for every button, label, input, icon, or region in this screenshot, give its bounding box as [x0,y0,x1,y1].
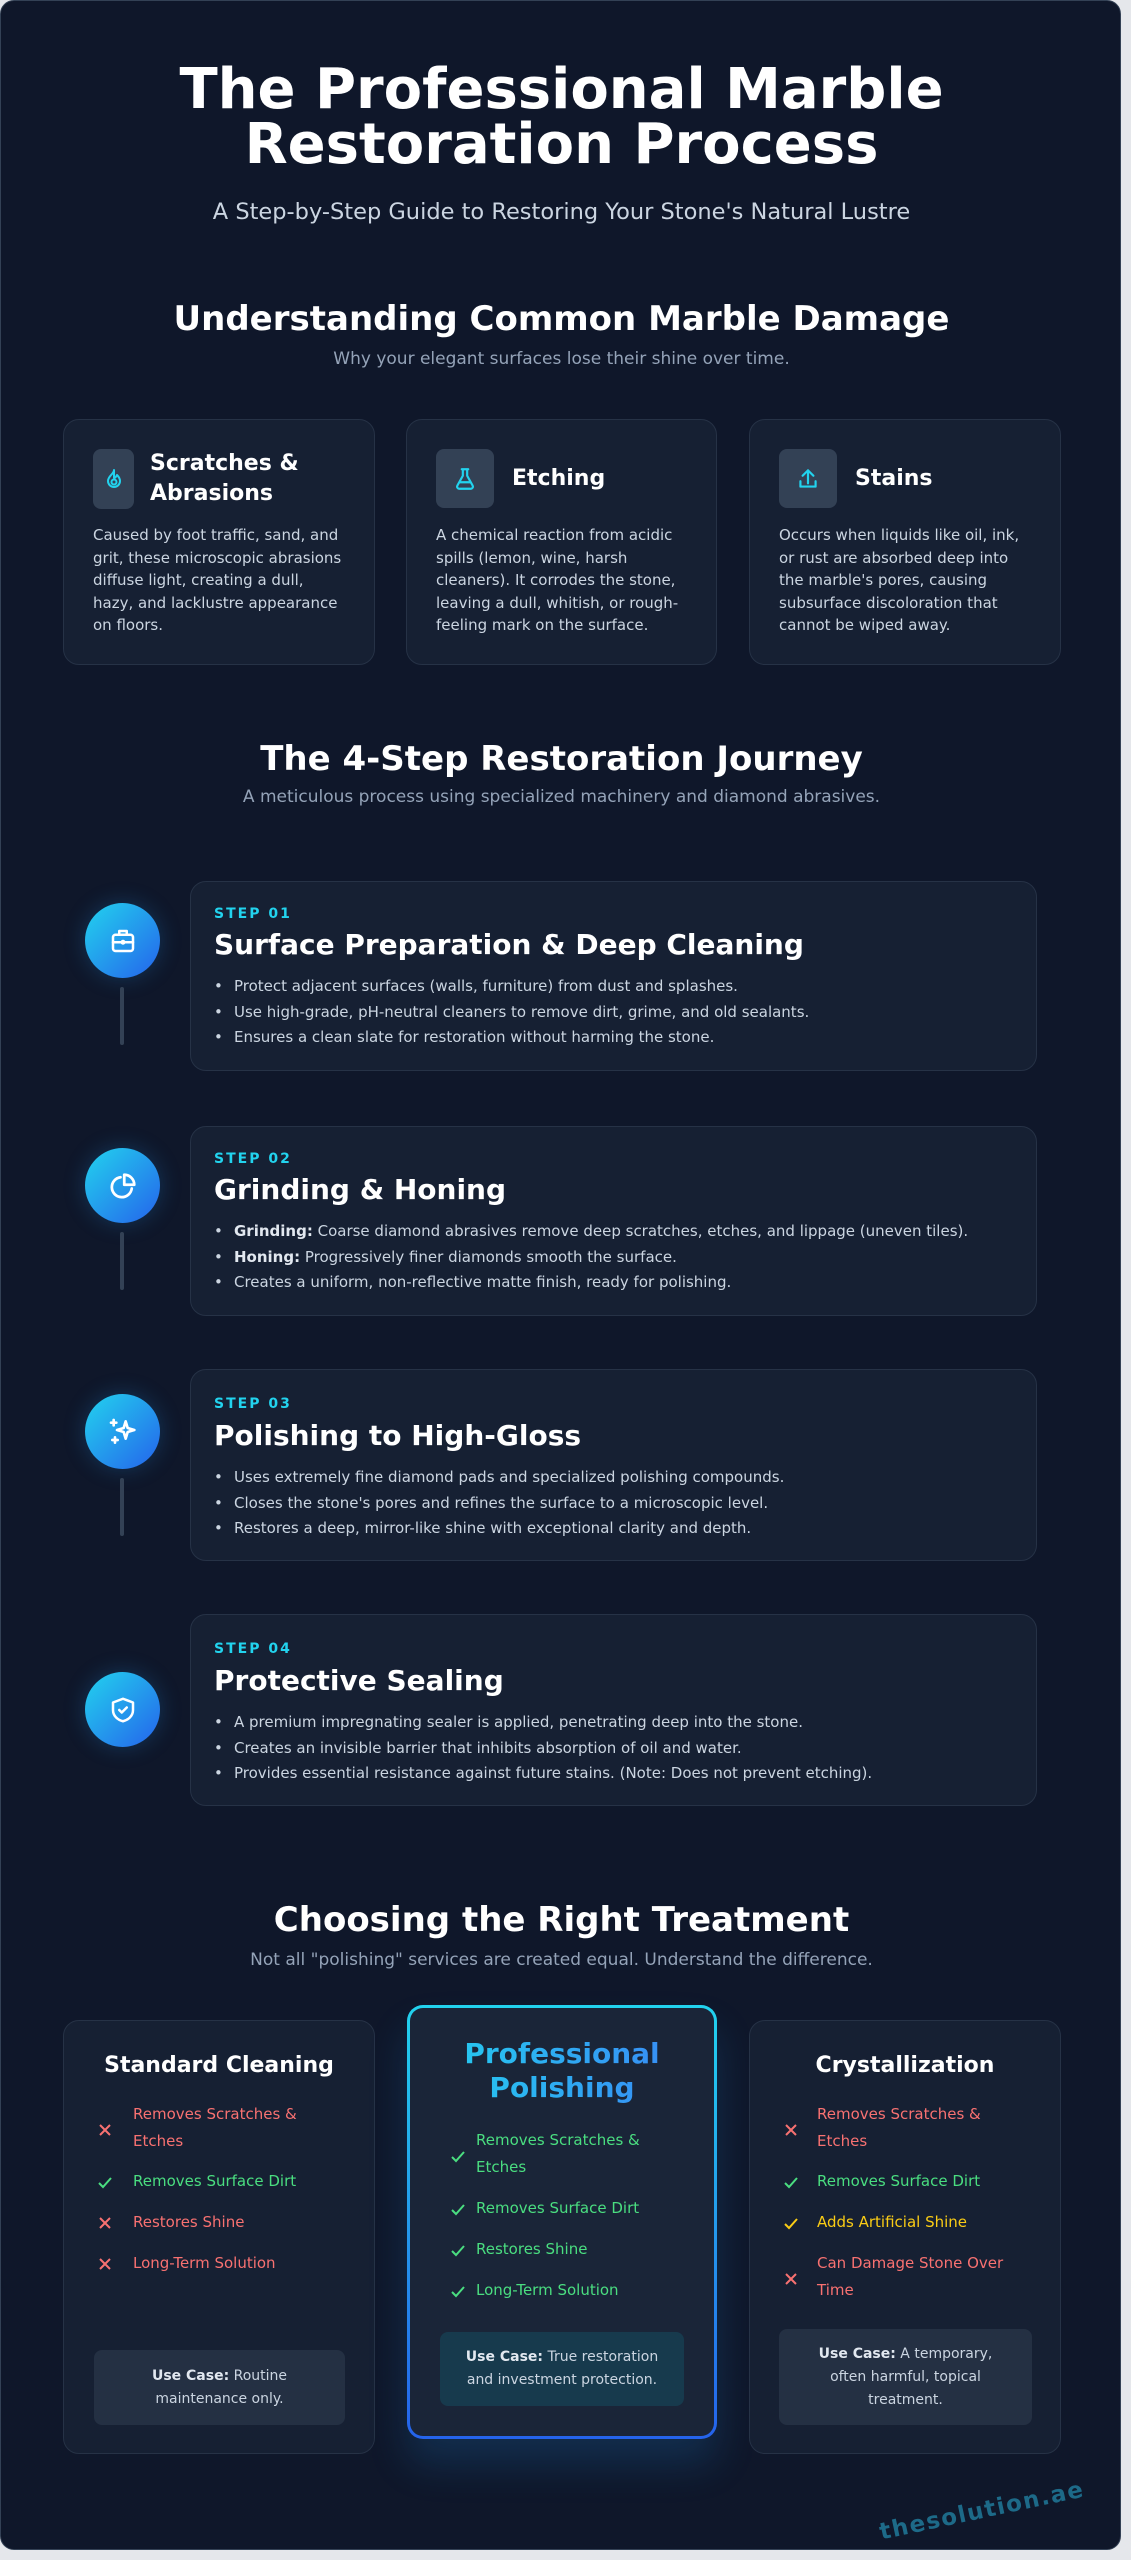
use case [94,2350,345,2425]
subheading: treatment: Not all "polishing" services are created equal. Understand the difference. [250,1950,873,1970]
use case: maintenance only. [155,2390,284,2406]
list: Removes Surface Dirt [817,2172,980,2190]
title: The Professional Marble [179,57,944,122]
step title: Surface Preparation & Deep Cleaning [214,928,804,961]
comparison title: Polishing [489,2071,635,2104]
bullets: Grinding: Coarse diamond abrasives remove deep scratches, etches, and lippage (uneven tiles). [234,1222,968,1240]
title: Restoration Process [245,112,878,177]
title [179,57,944,177]
bullets [216,1713,872,1782]
bullets: Honing: Progressively finer diamonds smooth the surface. [234,1248,677,1266]
heading: journey: The 4-Step Restoration Journey [260,739,863,779]
comparison title: Professional [464,2037,660,2070]
panel: standard cleaning [63,2020,375,2454]
card text: A chemical reaction from acidic spills (lemon, wine, harsh cleaners). It corrodes the stone, leaving a dull, whitish, or rough-feeling mark on the surface. [436,526,678,634]
list: Etches [133,2132,183,2150]
list: Removes Surface Dirt [476,2199,639,2217]
use case [779,2329,1032,2425]
panel: etching [406,419,717,665]
icon: step 1 briefcase [85,903,160,978]
step label: STEP 02 [214,1151,292,1167]
panel: step 4 [190,1614,1037,1806]
bullets [216,1222,968,1291]
step title: Grinding & Honing [214,1173,506,1206]
use case: Use Case: Routine [152,2368,287,2384]
use case [440,2332,684,2406]
card title: Scratches & [150,451,299,476]
use case: treatment. [868,2392,943,2408]
step title: Polishing to High-Gloss [214,1419,581,1452]
bullets: Use high-grade, pH-neutral cleaners to remove dirt, grime, and old sealants. [234,1003,809,1021]
icon: flask [436,449,494,508]
bullets [216,1468,784,1537]
icon: flame [93,449,134,509]
list [784,2105,1004,2299]
icon: step 3 sparkles [85,1394,160,1469]
list: Etches [476,2158,526,2176]
comparison title: Crystallization [816,2053,994,2078]
list: Time [817,2281,854,2299]
bullets: Uses extremely fine diamond pads and specialized polishing compounds. [234,1468,784,1486]
list: Removes Scratches & [817,2105,981,2123]
subheading: damage: Why your elegant surfaces lose their shine over time. [333,349,790,369]
bullets: Creates an invisible barrier that inhibits absorption of oil and water. [234,1739,742,1757]
card title: Stains [855,466,933,491]
subheading: journey: A meticulous process using specialized machinery and diamond abrasives. [243,787,880,807]
bullets: Closes the stone's pores and refines the surface to a microscopic level. [234,1494,768,1512]
list: Long-Term Solution [133,2254,276,2272]
bullets: A premium impregnating sealer is applied, penetrating deep into the stone. [234,1713,803,1731]
list: Removes Scratches & [133,2105,297,2123]
comparison title [410,2037,714,2105]
step label: STEP 03 [214,1396,292,1412]
panel: crystallization [749,2020,1061,2454]
comparison title: Standard Cleaning [104,2053,334,2078]
watermark: thesolution.ae [877,2477,1087,2545]
icon: step 4 shield [85,1672,160,1747]
list: Removes Scratches & [476,2131,640,2149]
bullets: Provides essential resistance against future stains. (Note: Does not prevent etching). [234,1764,872,1782]
card text: Caused by foot traffic, sand, and grit, these microscopic abrasions diffuse light, creating a dull, hazy, and lacklustre appearance on floors. [93,526,341,634]
use case: often harmful, topical [830,2368,981,2384]
bullets [216,977,809,1046]
card title: Etching [512,466,605,491]
list [451,2131,640,2299]
use case: and investment protection. [467,2372,657,2388]
card text: Occurs when liquids like oil, ink, or rust are absorbed deep into the marble's pores, causing subsurface discoloration that cannot be wiped away. [779,526,1019,634]
icon: upload [779,449,837,508]
icon: step 2 pie [85,1148,160,1223]
subtitle: A Step-by-Step Guide to Restoring Your Stone's Natural Lustre [213,199,910,225]
list: Long-Term Solution [476,2281,619,2299]
list: Adds Artificial Shine [817,2213,967,2231]
panel: scratches [63,419,375,665]
bullets: Ensures a clean slate for restoration without harming the stone. [234,1028,714,1046]
panel: step 3 [190,1369,1037,1561]
use case: Use Case: True restoration [466,2349,658,2365]
list: Removes Surface Dirt [133,2172,296,2190]
heading: damage: Understanding Common Marble Damage [174,299,949,339]
list: Restores Shine [133,2213,244,2231]
card title [150,451,299,506]
step title: Protective Sealing [214,1664,504,1697]
step label: STEP 04 [214,1641,292,1657]
list: Etches [817,2132,867,2150]
use case: Use Case: A temporary, [819,2346,992,2362]
list: Can Damage Stone Over [817,2254,1003,2272]
panel: professional polishing [407,2005,717,2439]
card title: Abrasions [150,481,273,506]
panel: stains [749,419,1061,665]
bullets: Restores a deep, mirror-like shine with exceptional clarity and depth. [234,1519,751,1537]
bullets: Protect adjacent surfaces (walls, furniture) from dust and splashes. [234,977,738,995]
step label: STEP 01 [214,906,292,922]
list: Restores Shine [476,2240,587,2258]
panel: step 2 [190,1126,1037,1316]
list [98,2105,297,2272]
panel: step 1 [190,881,1037,1071]
bullets: Creates a uniform, non-reflective matte finish, ready for polishing. [234,1273,731,1291]
heading: treatment: Choosing the Right Treatment [274,1900,849,1940]
